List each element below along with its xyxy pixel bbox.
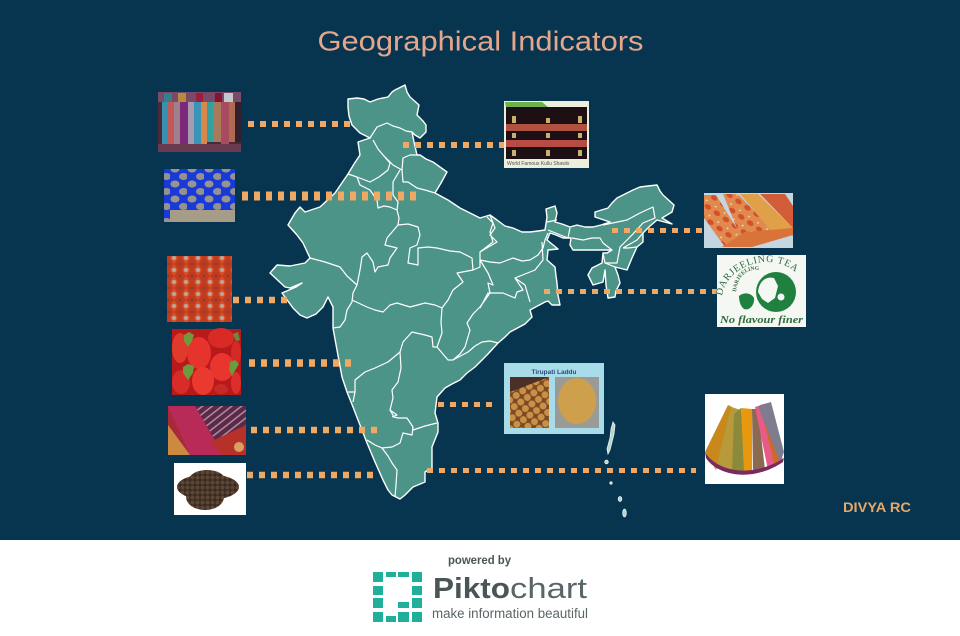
- dotted connector: Kullu shawl to Himachal Pradesh: [403, 142, 505, 148]
- photo: blue brocade: [164, 169, 235, 222]
- photo: stacked shawls: [158, 92, 241, 152]
- logo: Darjeeling Tea: No flavour finer: [719, 315, 804, 326]
- photo: fan of silk sarees: [705, 394, 784, 484]
- dotted connector: shawls to Jammu and Kashmir: [248, 121, 352, 127]
- photo: Tirupati Laddu: [504, 363, 604, 434]
- photo: Kullu shawl: World Famous Kullu Shawls: [507, 161, 570, 167]
- Piktochart wordmark: [433, 573, 587, 605]
- dotted connector: brocade to Uttar Pradesh: [242, 192, 416, 200]
- Andaman and Nicobar islands: [605, 422, 626, 517]
- Piktochart wordmark: chart: [510, 573, 587, 605]
- dotted connector: pepper to Kerala: [247, 472, 373, 478]
- dotted connector: laddu to Andhra Pradesh: [438, 402, 493, 407]
- title: Geographical Indicators: [318, 26, 644, 56]
- footer panel: [0, 540, 960, 636]
- photo: printed textile rolls: [704, 193, 793, 248]
- author credit: DIVYA RC: [843, 499, 911, 515]
- Piktochart tagline: make information beautiful: [432, 606, 588, 621]
- logo: Darjeeling Tea: DARJEELING TEA: [716, 255, 797, 296]
- dotted connector: silk saree to Karnataka: [251, 427, 378, 433]
- photo: strawberries: [172, 328, 241, 395]
- photo: Kullu shawl: [504, 101, 589, 168]
- dotted connector: Darjeeling tea to West Bengal: [544, 289, 717, 294]
- photo: silk saree: [168, 406, 246, 455]
- dotted connector: strawberries to Maharashtra: [249, 359, 351, 367]
- logo: Darjeeling Tea: [716, 255, 806, 327]
- logo: Darjeeling Tea: DARJEELING: [732, 266, 759, 292]
- dotted connector: sarees to Tamil Nadu: [427, 468, 696, 473]
- powered by label: powered by: [448, 555, 512, 567]
- dotted connector: textile to Assam: [612, 228, 704, 233]
- photo: black pepper: [174, 463, 246, 515]
- state borders: [310, 123, 655, 497]
- map of India: [270, 85, 674, 517]
- photo: Tirupati Laddu: Tirupati Laddu: [531, 369, 577, 376]
- photo: red block print: [167, 256, 232, 322]
- dotted connector: print to Gujarat: [233, 297, 287, 303]
- icon: Piktochart logo: [373, 572, 422, 622]
- map landmass: [270, 85, 674, 499]
- Piktochart wordmark: Pikto: [433, 573, 510, 605]
